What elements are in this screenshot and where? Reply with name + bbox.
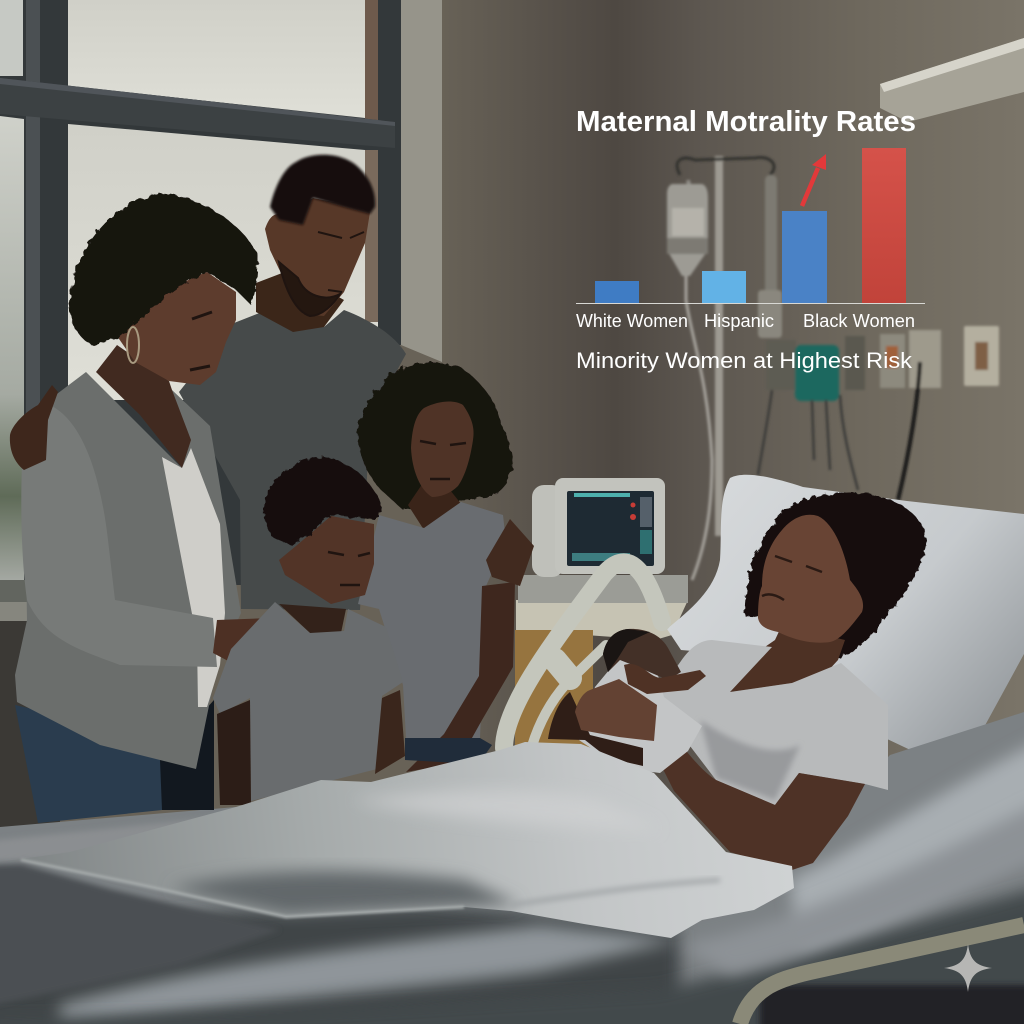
girl <box>358 362 534 772</box>
woman standing with grey cardigan <box>10 193 294 823</box>
neck <box>256 270 344 332</box>
white blanket <box>0 742 794 1010</box>
chart overlay: maternal mortality <box>576 106 925 373</box>
mother's face <box>758 515 863 643</box>
facial features <box>190 312 212 370</box>
grey shirt <box>358 502 506 738</box>
mother in bed with newborn <box>548 492 926 870</box>
beard and features <box>279 232 364 316</box>
newborn's wrap <box>579 658 702 773</box>
boy <box>213 457 405 805</box>
curly hair <box>69 193 258 345</box>
sleeve <box>21 403 217 667</box>
bed mattress and sheets <box>0 712 1024 1024</box>
chart title: Maternal Motrality Rates <box>576 106 916 138</box>
face <box>265 198 370 316</box>
bed lower rail <box>740 925 1024 1024</box>
label: white women: White Women <box>576 311 688 331</box>
bar: white women <box>595 281 639 303</box>
arm <box>406 582 515 772</box>
pillow <box>667 475 1024 773</box>
dark trouser <box>160 700 214 810</box>
neck and chest <box>96 345 191 468</box>
hair <box>270 155 375 225</box>
window with frame <box>0 0 442 831</box>
neck <box>408 480 462 530</box>
left arm <box>217 700 251 805</box>
sparkle icon <box>944 944 992 992</box>
grey t-shirt <box>213 602 403 801</box>
face <box>411 402 474 497</box>
newborn's head <box>603 629 681 680</box>
newborn's arm <box>624 664 706 694</box>
mother's eyes and lips <box>762 556 822 600</box>
mother's lower hand <box>548 692 643 766</box>
right arm <box>375 690 405 774</box>
face <box>279 516 374 604</box>
bed side rail <box>504 562 662 748</box>
mother's neck <box>730 625 845 692</box>
man's hand on woman's shoulder <box>10 385 58 470</box>
mother's arm <box>647 708 865 870</box>
wall light fixture <box>880 38 1024 122</box>
sweater <box>179 310 406 610</box>
bar: hispanic <box>702 271 746 303</box>
jeans <box>15 705 165 823</box>
wall outlets and cables <box>758 326 999 500</box>
face <box>117 272 236 385</box>
bedside monitor and cart <box>515 478 688 748</box>
white shirt <box>162 448 225 707</box>
man's hand on girl <box>486 519 534 586</box>
facial features <box>328 552 370 585</box>
hair <box>264 457 382 546</box>
hand on boy <box>213 618 294 676</box>
facial features <box>420 441 466 479</box>
mother's shirt <box>660 640 888 805</box>
IV pole and bags <box>667 156 782 580</box>
bar: highest risk <box>862 148 906 303</box>
hair <box>358 362 513 510</box>
mother's upper hand <box>575 679 657 741</box>
subtitle: Minority Women at Highest Risk <box>576 348 913 373</box>
jeans <box>405 738 492 763</box>
arrow pointing up <box>802 154 826 206</box>
chart baseline <box>576 303 925 304</box>
man standing <box>179 155 406 610</box>
hoop earring <box>127 327 139 363</box>
mother's hair <box>744 492 926 658</box>
label: black women: Black Women <box>803 311 915 331</box>
bar: black women <box>782 211 827 303</box>
label: hispanic: Hispanic <box>704 311 774 331</box>
neck <box>279 604 346 633</box>
cardigan <box>15 372 241 769</box>
